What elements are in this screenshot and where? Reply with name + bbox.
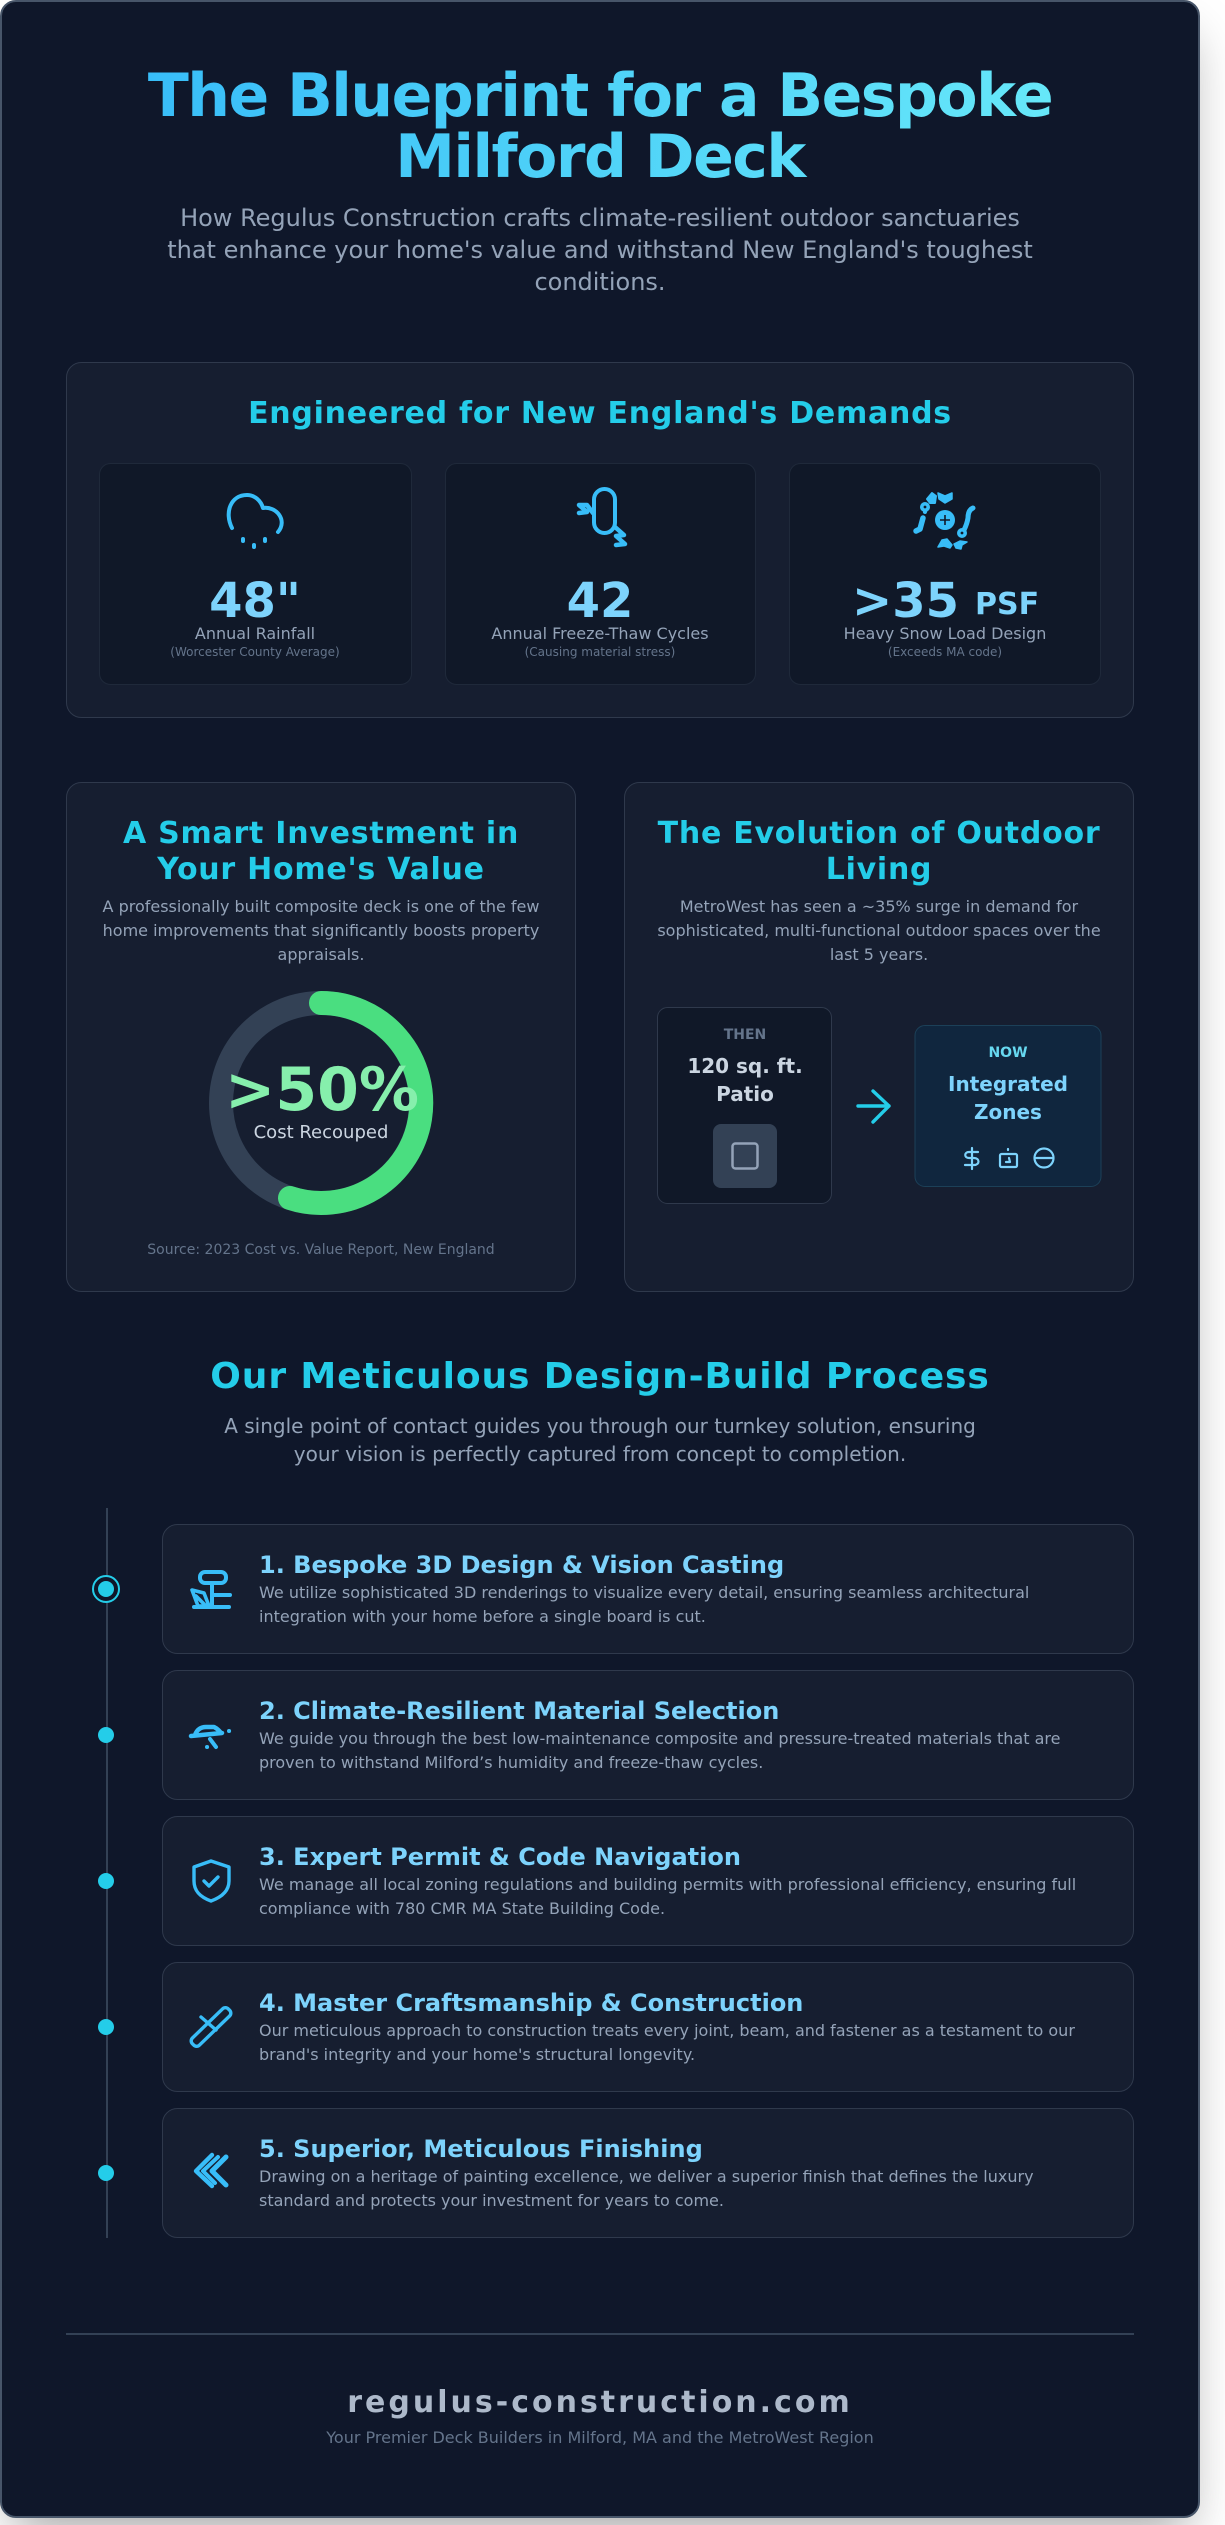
then card: Patio <box>716 1082 774 1106</box>
heading: Engineered for New England's Demands <box>248 396 952 431</box>
step 1: 1. Bespoke 3D Design & Vision Casting <box>259 1551 784 1579</box>
donut chart: more than 50% cost recouped <box>221 1003 421 1203</box>
icon: double chevron <box>196 2155 226 2186</box>
then card <box>658 1008 832 1204</box>
stat card: freeze-thaw: (Causing material stress) <box>525 645 675 659</box>
donut chart: more than 50% cost recouped: >50% <box>225 1055 419 1125</box>
step 4: 4. Master Craftsmanship & Construction <box>259 1989 803 2017</box>
description: sophisticated, multi-functional outdoor spaces over the <box>657 921 1101 940</box>
subtitle: that enhance your home's value and withstand New England's toughest <box>167 236 1033 264</box>
arrow <box>858 1091 889 1122</box>
title: The Blueprint for a Bespoke <box>148 61 1052 131</box>
subtitle <box>167 204 1033 296</box>
stat card: freeze-thaw: 42 <box>567 573 633 629</box>
now card: Zones <box>974 1100 1042 1124</box>
icon: circle minus <box>1034 1148 1054 1168</box>
stat card: snow load: (Exceeds MA code) <box>888 645 1002 659</box>
icon: freeze-thaw <box>579 489 625 545</box>
stat card: rainfall: (Worcester County Average) <box>170 645 340 659</box>
step 2: We guide you through the best low-maintenance composite and pressure-treated materials that are <box>259 1729 1060 1748</box>
panel: evolution of outdoor living <box>624 782 1134 1292</box>
description: A professionally built composite deck is one of the few <box>103 897 539 916</box>
description: MetroWest has seen a ~35% surge in demand for <box>680 897 1079 916</box>
icon: rain cloud <box>229 495 282 547</box>
stat card: snow load <box>790 464 1100 684</box>
icon: materials <box>191 1727 229 1747</box>
step 2: 2. Climate-Resilient Material Selection <box>259 1697 779 1725</box>
now card: NOW <box>988 1045 1028 1061</box>
step 3 <box>162 1816 1134 1946</box>
process intro <box>224 1414 976 1466</box>
step 4 <box>162 1962 1134 2092</box>
then card: THEN <box>724 1027 766 1043</box>
stat card: rainfall: 48" <box>209 573 301 629</box>
icon: design <box>192 1572 230 1607</box>
heading: The Evolution of Outdoor <box>658 816 1100 851</box>
icon: snow load <box>916 493 973 549</box>
step 1 <box>162 1524 1134 1654</box>
stat card: freeze-thaw: Annual Freeze-Thaw Cycles <box>491 624 709 643</box>
now card <box>915 1026 1101 1186</box>
now card: Integrated <box>948 1072 1068 1096</box>
title: Milford Deck <box>395 122 808 192</box>
step 3: 3. Expert Permit & Code Navigation <box>259 1843 741 1871</box>
step 5: standard and protects your investment for years to come. <box>259 2191 724 2210</box>
step 1: We utilize sophisticated 3D renderings to visualize every detail, ensuring seamless architectural <box>259 1583 1029 1602</box>
description <box>103 897 539 964</box>
process intro: your vision is perfectly captured from concept to completion. <box>294 1442 906 1466</box>
footer website: regulus-construction.com <box>347 2385 853 2420</box>
step 4: brand's integrity and your home's structural longevity. <box>259 2045 695 2064</box>
footer divider <box>66 2333 1134 2335</box>
step 4: Our meticulous approach to construction treats every joint, beam, and fastener as a testament to our <box>259 2021 1075 2040</box>
step 3: compliance with 780 CMR MA State Building Code. <box>259 1899 665 1918</box>
process heading: Our Meticulous Design-Build Process <box>210 1356 990 1397</box>
stat card: freeze-thaw <box>446 464 756 684</box>
stat card: rainfall: Annual Rainfall <box>195 624 315 643</box>
stat card: snow load: >35 <box>852 573 959 629</box>
description: home improvements that significantly boosts property <box>103 921 539 940</box>
stat card: snow load: Heavy Snow Load Design <box>844 624 1046 643</box>
step 5: Drawing on a heritage of painting excellence, we deliver a superior finish that defines the luxury <box>259 2167 1034 2186</box>
then card: 120 sq. ft. <box>687 1054 803 1078</box>
description: last 5 years. <box>830 945 928 964</box>
heading: Living <box>826 852 932 887</box>
icon: patio square <box>713 1124 777 1188</box>
step 5: 5. Superior, Meticulous Finishing <box>259 2135 703 2163</box>
heading: Your Home's Value <box>156 852 485 887</box>
stat card: rainfall <box>100 464 412 684</box>
panel: smart investment <box>66 782 576 1292</box>
icon: ruler <box>190 2006 232 2048</box>
description: appraisals. <box>278 945 364 964</box>
icon: device <box>1000 1149 1017 1167</box>
timeline <box>93 1508 119 2238</box>
step 2: proven to withstand Milford’s humidity and freeze-thaw cycles. <box>259 1753 763 1772</box>
description <box>657 897 1101 964</box>
donut chart: more than 50% cost recouped: Cost Recouped <box>254 1122 388 1143</box>
icon: shield check <box>194 1861 229 1901</box>
stat card: snow load: PSF <box>975 587 1039 622</box>
source note: Source: 2023 Cost vs. Value Report, New England <box>147 1242 495 1258</box>
step 5 <box>162 2108 1134 2238</box>
footer tagline: Your Premier Deck Builders in Milford, MA and the MetroWest Region <box>325 2428 874 2447</box>
heading: A Smart Investment in <box>123 816 519 851</box>
panel: engineered for New England's demands <box>66 362 1134 718</box>
step 2 <box>162 1670 1134 1800</box>
title <box>148 61 1052 192</box>
step 1: integration with your home before a single board is cut. <box>259 1607 706 1626</box>
process intro: A single point of contact guides you through our turnkey solution, ensuring <box>224 1414 976 1438</box>
step 3: We manage all local zoning regulations and building permits with professional efficiency, ensuring full <box>259 1875 1076 1894</box>
icon: dollar <box>965 1148 978 1169</box>
heading <box>123 816 519 887</box>
heading <box>658 816 1100 887</box>
subtitle: How Regulus Construction crafts climate-resilient outdoor sanctuaries <box>180 204 1020 232</box>
subtitle: conditions. <box>534 268 666 296</box>
